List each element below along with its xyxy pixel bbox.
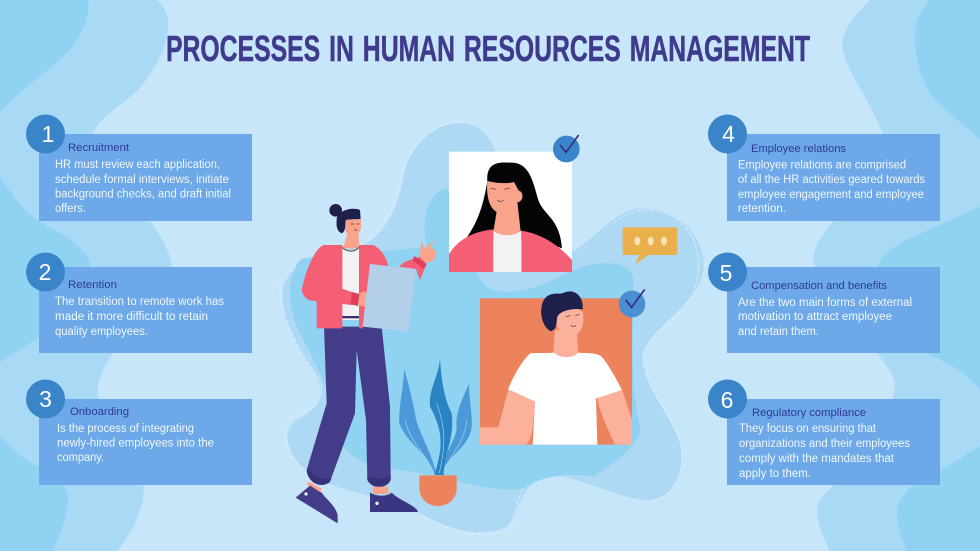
face [344, 219, 361, 236]
card 6: Regulatory compliance: Regulatory compliance [752, 407, 866, 419]
shoes [296, 486, 338, 523]
card 4: Employee relations: of all the HR activities geared towards [738, 174, 925, 186]
card 5: Compensation and benefits [708, 252, 940, 353]
card 6: Regulatory compliance: organizations and their employees [739, 438, 910, 450]
photo card: woman [449, 152, 572, 272]
raised arm [399, 257, 427, 280]
shirt [342, 247, 359, 320]
card 6: Regulatory compliance: comply with the mandates that [739, 453, 895, 465]
check badge: woman [553, 135, 580, 162]
card 1: Recruitment: offers. [55, 203, 86, 215]
card 6: Regulatory compliance: apply to them. [739, 468, 811, 480]
card 5: Compensation and benefits: Compensation and benefits [751, 280, 887, 292]
card 2: Retention: Retention [68, 279, 117, 291]
clipboard [363, 264, 416, 332]
bun [329, 204, 342, 217]
photo card: man [480, 291, 632, 445]
card 5: Compensation and benefits: Are the two main forms of external [738, 297, 912, 309]
card 3: Onboarding: newly-hired employees into the [57, 438, 214, 450]
speech bubble [623, 227, 677, 264]
card 1: Recruitment: Recruitment [68, 142, 129, 154]
plant [399, 359, 472, 506]
card 6: Regulatory compliance: They focus on ensuring that [739, 423, 877, 435]
blob backdrop [280, 121, 704, 534]
card 4: Employee relations: retention. [738, 203, 786, 215]
card 5: Compensation and benefits: motivation to attract employee [738, 311, 892, 323]
card 5: Compensation and benefits: 5 [720, 260, 732, 286]
neck [343, 232, 359, 248]
card 1: Recruitment: schedule formal interviews, initiate [55, 174, 229, 186]
card 6: Regulatory compliance: 6 [721, 387, 733, 413]
standing woman with clipboard [296, 204, 436, 523]
card 2: Retention: 2 [39, 259, 51, 285]
card 3: Onboarding: Onboarding [70, 406, 129, 418]
card 3: Onboarding: 3 [39, 386, 52, 412]
pants [307, 327, 391, 486]
card 2: Retention [26, 252, 252, 353]
card 4: Employee relations: Employee relations are comprised [738, 160, 906, 172]
central illustration [280, 121, 704, 534]
card 4: Employee relations: 4 [722, 121, 735, 147]
card 3: Onboarding [26, 380, 252, 485]
card 2: Retention: made it more difficult to retain [55, 311, 208, 323]
card 1: Recruitment: 1 [42, 121, 54, 147]
card 1: Recruitment: HR must review each application, [55, 159, 220, 171]
card 1: Recruitment [26, 114, 252, 221]
hand [358, 292, 378, 307]
card 2: Retention: The transition to remote work has [55, 296, 224, 308]
card 4: Employee relations [708, 114, 940, 221]
card 2: Retention: quality employees. [55, 326, 148, 338]
card 4: Employee relations: Employee relations [751, 143, 846, 155]
check badge: man [619, 289, 645, 317]
card 1: Recruitment: background checks, and draft initial [55, 188, 231, 200]
card 3: Onboarding: company. [57, 452, 104, 464]
jacket [317, 245, 342, 328]
background: left waves [0, 0, 172, 551]
ankles [307, 482, 388, 494]
background: right waves [813, 0, 980, 551]
card 3: Onboarding: Is the process of integrating [57, 423, 194, 435]
hair [337, 209, 361, 233]
card 4: Employee relations: employee engagement and employee [738, 189, 924, 201]
card 5: Compensation and benefits: and retain them. [738, 326, 819, 338]
card 6: Regulatory compliance [708, 380, 940, 485]
